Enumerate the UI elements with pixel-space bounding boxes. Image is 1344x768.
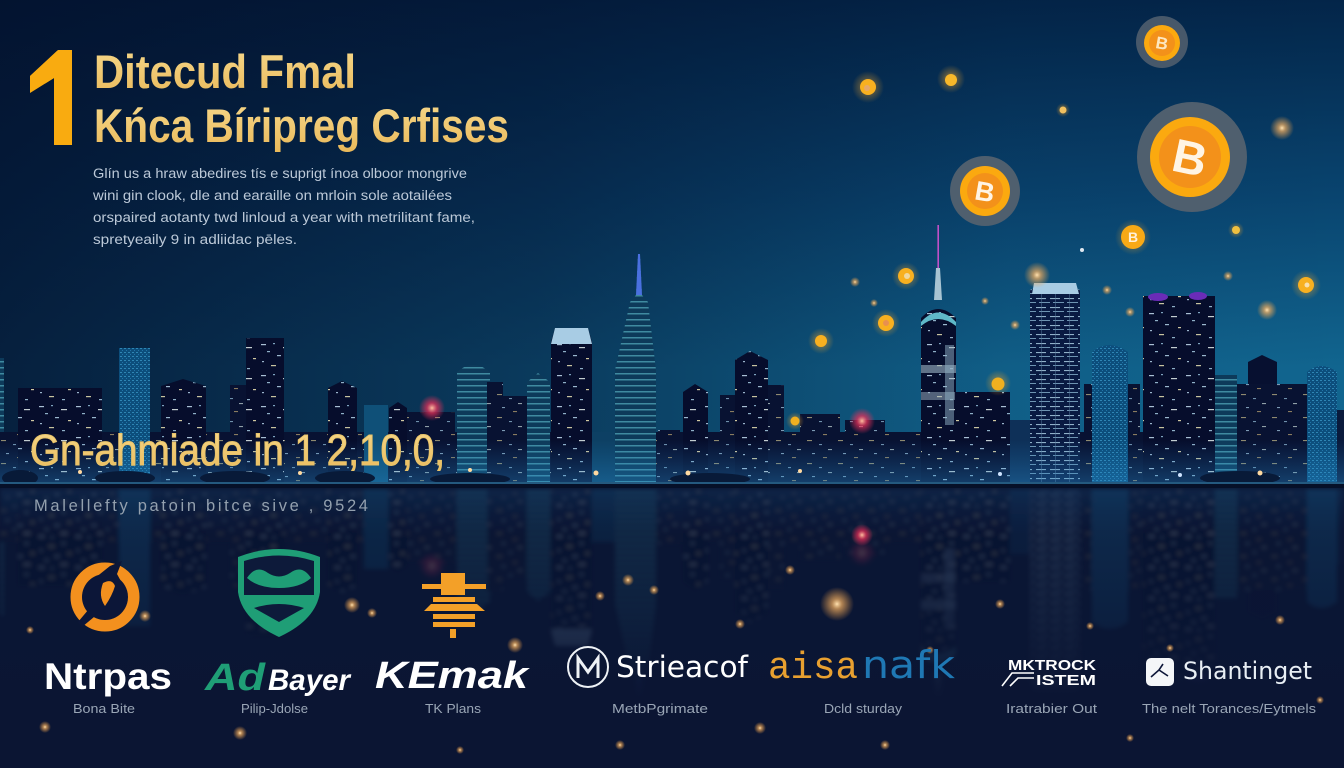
intro paragraph: orspaired aotanty twd linloud a year with metrilitant fame, [93, 210, 475, 225]
brand: Mktrock Istem: ISTEM [1036, 672, 1096, 689]
brand: Mktrock Istem [1002, 657, 1098, 716]
big number 1: 1 [15, 22, 87, 175]
coin: large [1137, 102, 1247, 212]
brand: Bayer [204, 549, 352, 716]
brand: Ntrpas: Ntrpas [44, 656, 172, 697]
brand: Bayer: Bayer [268, 664, 352, 697]
coin: top [1136, 16, 1188, 68]
brand: Bayer: Ad [204, 657, 266, 699]
coin: small: B [1128, 229, 1138, 245]
brand: Shantinget: The nelt Torances/Eytmels [1142, 702, 1316, 716]
intro paragraph: spretyeaily 9 in adliidac pēles. [93, 232, 297, 247]
title: Ditecud Fmal [94, 45, 356, 98]
brand: Mktrock Istem: MKTROCK [1008, 657, 1096, 674]
coin: medium: B [973, 176, 997, 208]
intro paragraph [92, 166, 475, 247]
shoreline trees and horizon band [0, 468, 1344, 489]
brand: Shantinget: Shantinget [1183, 657, 1312, 685]
water with skyline reflection [0, 484, 1344, 768]
brand: aisa nafk: Dcld sturday [824, 702, 903, 716]
intro paragraph: wini gin clook, dle and earaille on mrloin sole aotailées [92, 188, 452, 203]
brand: Mktrock Istem: Iratrabier Out [1006, 702, 1098, 716]
brand: aisa nafk: nafk [862, 643, 955, 687]
icon: white rounded square [1146, 658, 1174, 686]
brand: Ntrpas [44, 561, 172, 716]
night sky background [0, 0, 1344, 490]
floating bitcoin coins [786, 16, 1321, 430]
brand: Ntrpas: Bona Bite [73, 702, 135, 716]
title [94, 45, 509, 152]
brand: Strieacof: MetbPgrimate [612, 702, 708, 716]
water bokeh lights [26, 524, 1324, 754]
coin: small [1115, 219, 1151, 255]
statistic caption: Malellefty patoin bitce sive , 9524 [34, 497, 368, 515]
brand: Strieacof [568, 647, 749, 716]
icon: green shield [238, 549, 320, 637]
intro paragraph: Glín us a hraw abedires tís e suprigt ínoa olboor mongrive [93, 166, 467, 181]
coin: medium [950, 156, 1020, 226]
brand: Strieacof: Strieacof [616, 650, 749, 684]
brand: Shantinget [1142, 657, 1316, 716]
icon: orange stack [422, 573, 486, 638]
icon: circled M [568, 647, 608, 687]
brand: Bayer: Pilip-Jdolse [241, 702, 308, 716]
coin: large: B [1168, 128, 1212, 187]
brand: KEmak [375, 573, 530, 716]
coin: top: B [1154, 33, 1170, 54]
brand: KEmak: TK Plans [425, 702, 481, 716]
brand: aisa nafk [768, 643, 955, 716]
title: Kńca Bíripreg Crfises [94, 99, 509, 152]
headline statistic: Gn-ahmiade in 1 2,10,0, [30, 426, 445, 475]
brand: aisa nafk: aisa [768, 647, 858, 690]
city skyline [0, 225, 1344, 485]
icon: orange ring [76, 561, 134, 627]
glowing tiny coins [786, 65, 1321, 430]
brand: KEmak: KEmak [375, 655, 530, 697]
